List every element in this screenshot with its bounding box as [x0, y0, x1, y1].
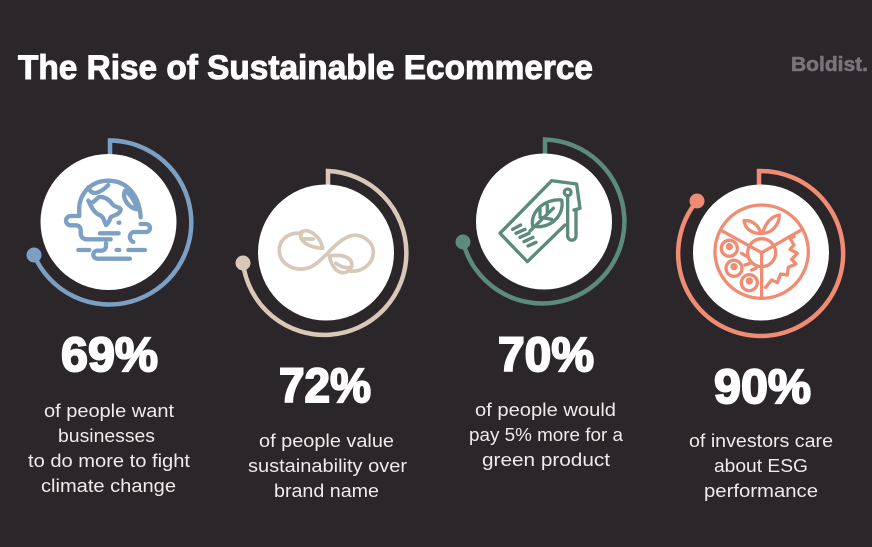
white disc	[258, 184, 394, 320]
icon: ESG wheel	[715, 205, 808, 298]
title: The Rise of Sustainable Ecommerce	[18, 49, 593, 87]
stat: 70%: 70%	[498, 329, 594, 382]
icon: leaf infinity	[279, 231, 373, 273]
text: description: brand name	[274, 481, 379, 501]
panel: 69% climate	[26, 140, 191, 496]
white disc	[40, 154, 176, 290]
text: description: of people would	[475, 400, 616, 420]
panel: 70% green product	[456, 140, 624, 470]
progress ring: blue	[26, 140, 191, 304]
text: description: pay 5% more for a	[469, 425, 624, 445]
text: description: of people want	[44, 401, 174, 421]
text: description: of investors care	[689, 431, 833, 451]
text: description	[248, 431, 407, 501]
text: description: performance	[704, 481, 818, 501]
progress ring: green	[456, 140, 624, 303]
stat: 72%: 72%	[279, 360, 371, 413]
text: description	[469, 400, 624, 470]
logo: Boldist: Boldist.	[791, 54, 868, 76]
icon: eco price tag	[500, 181, 580, 262]
panel: 72% brand	[236, 171, 407, 501]
text: description: of people value	[259, 431, 394, 451]
white disc	[693, 184, 829, 320]
text: description: green product	[482, 450, 610, 470]
white disc	[476, 154, 612, 290]
stat: 90%: 90%	[714, 361, 811, 414]
stat: 69%: 69%	[61, 329, 158, 382]
text: description: businesses	[58, 426, 155, 446]
text: description	[28, 401, 190, 496]
text: description	[689, 431, 833, 501]
text: description: climate change	[41, 476, 176, 496]
panel: 90% ESG	[678, 171, 843, 501]
progress ring: coral	[678, 171, 843, 336]
text: description: to do more to fight	[28, 451, 190, 471]
text: description: sustainability over	[248, 456, 407, 476]
text: description: about ESG	[714, 456, 808, 476]
icon: melting globe	[66, 181, 150, 259]
progress ring: beige	[236, 171, 406, 335]
